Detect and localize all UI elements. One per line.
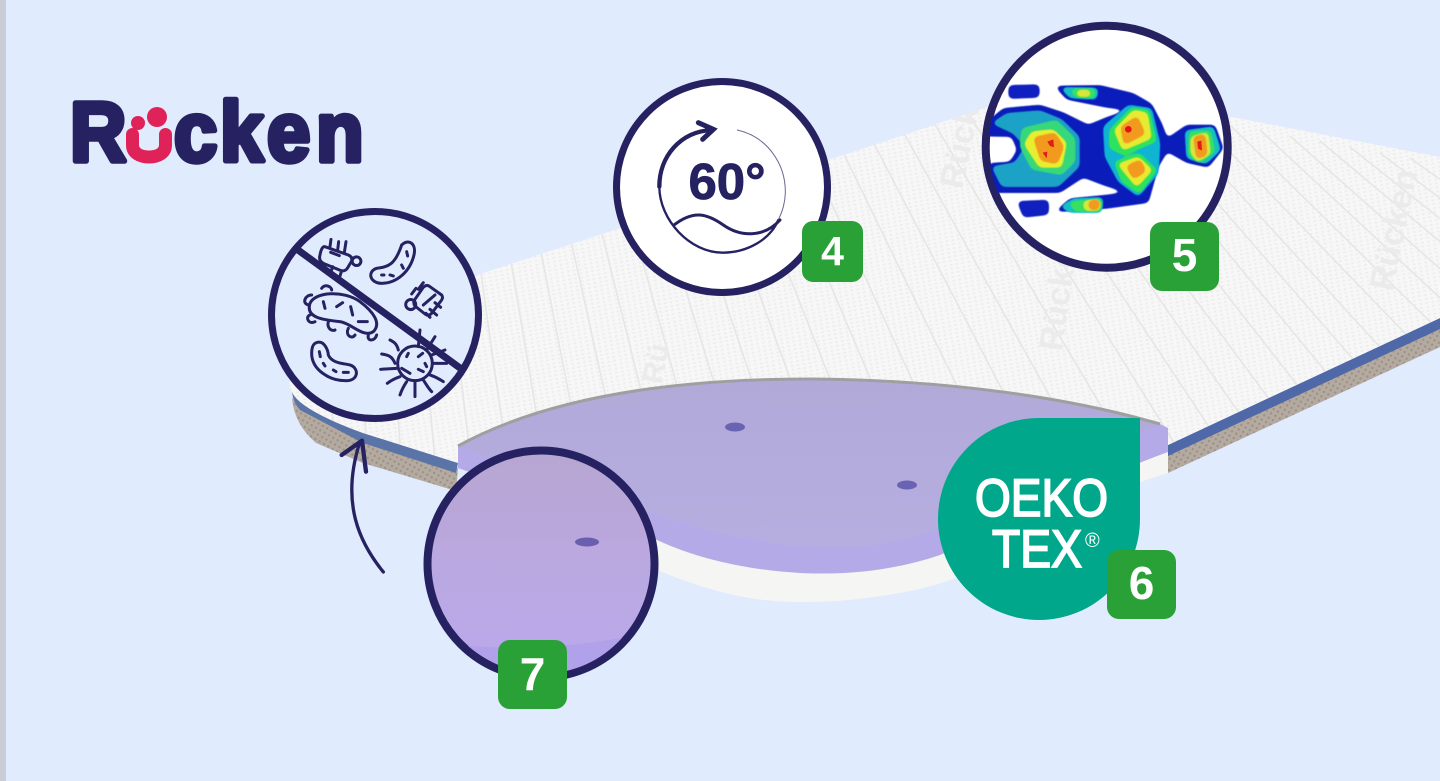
embossed brand marks on cover: Rücken — [1032, 226, 1087, 353]
number badge 4: 4 — [821, 228, 844, 274]
bacterium top left — [320, 239, 361, 276]
virus — [398, 346, 432, 381]
close-up foam edge — [468, 638, 622, 674]
circle — [272, 212, 478, 418]
teal zone — [992, 111, 1079, 187]
logo: Rücken — [70, 86, 364, 180]
close-up circle — [428, 450, 654, 678]
arrow to mattress edge — [342, 441, 383, 572]
circle — [616, 82, 828, 292]
close-up hole — [575, 538, 599, 546]
number badge 7: 7 — [520, 648, 545, 700]
green zone — [1020, 120, 1075, 175]
number badge 4 — [802, 221, 863, 282]
embossed brand marks on cover: Rücken — [1363, 166, 1425, 294]
callout 6: OEKO-TEX label — [938, 418, 1140, 620]
yellow zone — [1024, 129, 1067, 167]
registered mark: ® — [1085, 530, 1100, 552]
60 label: 60° — [688, 153, 766, 210]
callout 5: pressure heat map — [983, 26, 1228, 268]
number badge 6: 6 — [1129, 557, 1154, 609]
callout 7: foam close-up — [428, 450, 654, 678]
silhouette — [983, 85, 1223, 212]
number badge 5 — [1150, 222, 1219, 291]
embossed brand marks on cover — [636, 64, 1425, 386]
embossed brand marks on cover: Rücken — [933, 64, 995, 192]
wave — [674, 215, 780, 234]
white base foam layer — [458, 445, 1168, 602]
quilting ribs — [332, 116, 1440, 456]
teardrop badge — [938, 418, 1140, 620]
bacteria icons — [305, 239, 447, 397]
grey cut edge — [458, 379, 1160, 446]
arrow head — [698, 123, 713, 139]
number badge 7 — [498, 640, 567, 709]
logo wordmark: Rücken — [70, 86, 364, 180]
strike-through line — [298, 250, 460, 368]
mattress illustration — [290, 106, 1440, 602]
foam ventilation holes — [725, 422, 917, 490]
mattress quilted top cover — [290, 106, 1440, 463]
OEKO TEX wordmark: OEKO — [975, 469, 1108, 528]
bacterium right — [406, 283, 442, 317]
thin arc — [737, 130, 785, 220]
purple foam top surface — [460, 381, 1158, 547]
hands — [1009, 85, 1049, 217]
logo pink dots — [131, 107, 167, 130]
wash cycle icon — [659, 123, 785, 253]
red spots — [1043, 139, 1202, 158]
large bacterium — [305, 286, 377, 340]
rod top right — [371, 242, 414, 283]
thick arc — [659, 130, 712, 187]
purple memory foam side — [458, 379, 1168, 574]
heat map body — [983, 85, 1223, 217]
embossed brand marks on cover: Rü — [636, 341, 676, 386]
logo pink u — [132, 134, 166, 157]
number badge 6 — [1107, 550, 1176, 619]
mattress side blue stripe — [292, 318, 1440, 473]
number badge 5: 5 — [1172, 229, 1197, 281]
lower arc — [659, 187, 778, 253]
rod bottom left — [312, 342, 356, 381]
left edge strip — [0, 0, 6, 781]
callout 3: antibacterial icon — [272, 212, 478, 418]
orange zone — [1033, 116, 1207, 210]
circle — [986, 26, 1228, 268]
callout 4: 60 degree wash — [616, 82, 828, 292]
mattress side tan mesh layer — [292, 322, 1440, 491]
callout 6: OEKO-TEX label: TEX — [992, 520, 1082, 579]
